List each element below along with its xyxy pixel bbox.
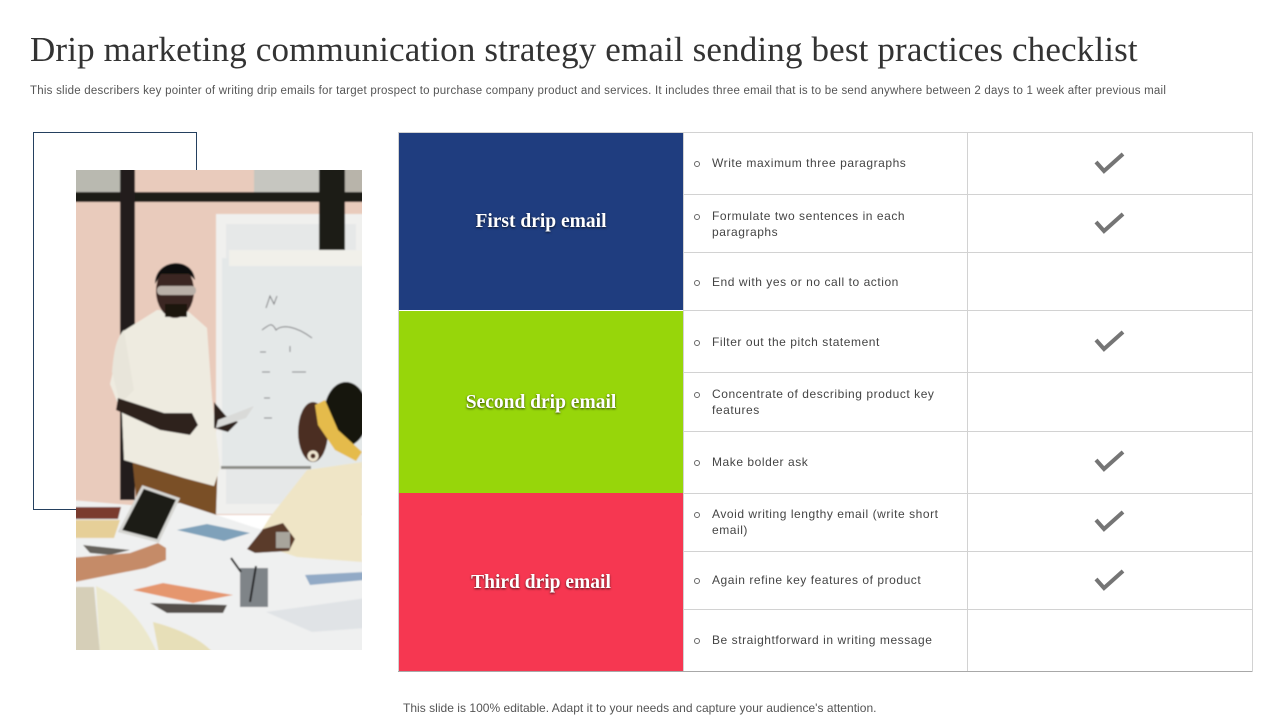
checklist item 7: email) xyxy=(712,523,748,537)
wall xyxy=(70,165,370,515)
paper right xyxy=(305,572,365,585)
blue paper xyxy=(177,524,250,541)
checklist item 9: Be straightforward in writing message xyxy=(712,633,932,647)
checklist item 5: Concentrate of describing product key xyxy=(712,387,934,401)
checklist item 4: Filter out the pitch statement xyxy=(712,335,880,349)
folders xyxy=(70,507,121,519)
panel: second drip email: Second drip email xyxy=(466,392,616,412)
woman jacket xyxy=(259,462,362,562)
subtitle description: This slide describers key pointer of writing drip emails for target prospect to purchase company product and services. It includes three email that is to be send anywhere between 2 days to 1 week after previous mail xyxy=(30,85,1166,97)
icon: check row 7 xyxy=(1096,512,1123,529)
man arms xyxy=(116,398,198,435)
footer note: This slide is 100% editable. Adapt it to your needs and capture your audience's attention. xyxy=(403,701,877,715)
panel: third drip email xyxy=(399,493,683,671)
checklist item 7 xyxy=(712,507,939,537)
panel: first drip email xyxy=(399,133,683,310)
panel: first drip email: First drip email xyxy=(475,210,607,232)
panel: third drip email: Third drip email xyxy=(471,572,611,592)
table xyxy=(76,500,362,650)
window frames xyxy=(70,192,370,202)
whiteboard xyxy=(222,258,368,468)
man trousers xyxy=(132,462,218,516)
checklist item 6: Make bolder ask xyxy=(712,455,808,469)
woman face and hair xyxy=(298,402,328,462)
checklist item 5: features xyxy=(712,403,760,417)
door xyxy=(216,214,366,514)
checklist item 2: paragraphs xyxy=(712,225,778,239)
checklist item 3: End with yes or no call to action xyxy=(712,275,899,289)
title: Drip marketing communication strategy email sending best practices checklist xyxy=(30,30,1138,69)
checklist item 7: Avoid writing lengthy email (write short xyxy=(712,507,939,521)
decorative photo outline frame xyxy=(33,132,197,510)
icon: check row 8 xyxy=(1096,571,1123,588)
chairs xyxy=(76,586,100,650)
woman arm xyxy=(247,523,295,553)
icon: check row 1 xyxy=(1096,154,1123,171)
orange paper xyxy=(133,583,233,603)
checklist item 1: Write maximum three paragraphs xyxy=(712,156,906,170)
icon: check row 2 xyxy=(1096,214,1123,231)
check marks xyxy=(1094,152,1124,591)
man head xyxy=(156,264,194,318)
checklist item 2 xyxy=(712,209,905,239)
man shirt xyxy=(110,310,220,486)
checklist item 8: Again refine key features of product xyxy=(712,573,921,587)
checklist item 2: Formulate two sentences in each xyxy=(712,209,905,223)
pen cup xyxy=(240,568,268,607)
panel: second drip email xyxy=(399,311,683,493)
arm on laptop xyxy=(70,543,166,583)
icon: check row 6 xyxy=(1096,452,1123,469)
laptop xyxy=(120,487,178,541)
icon: check row 4 xyxy=(1096,332,1123,349)
checklist item 5 xyxy=(712,387,934,417)
photo: team meeting at a whiteboard xyxy=(76,170,362,650)
